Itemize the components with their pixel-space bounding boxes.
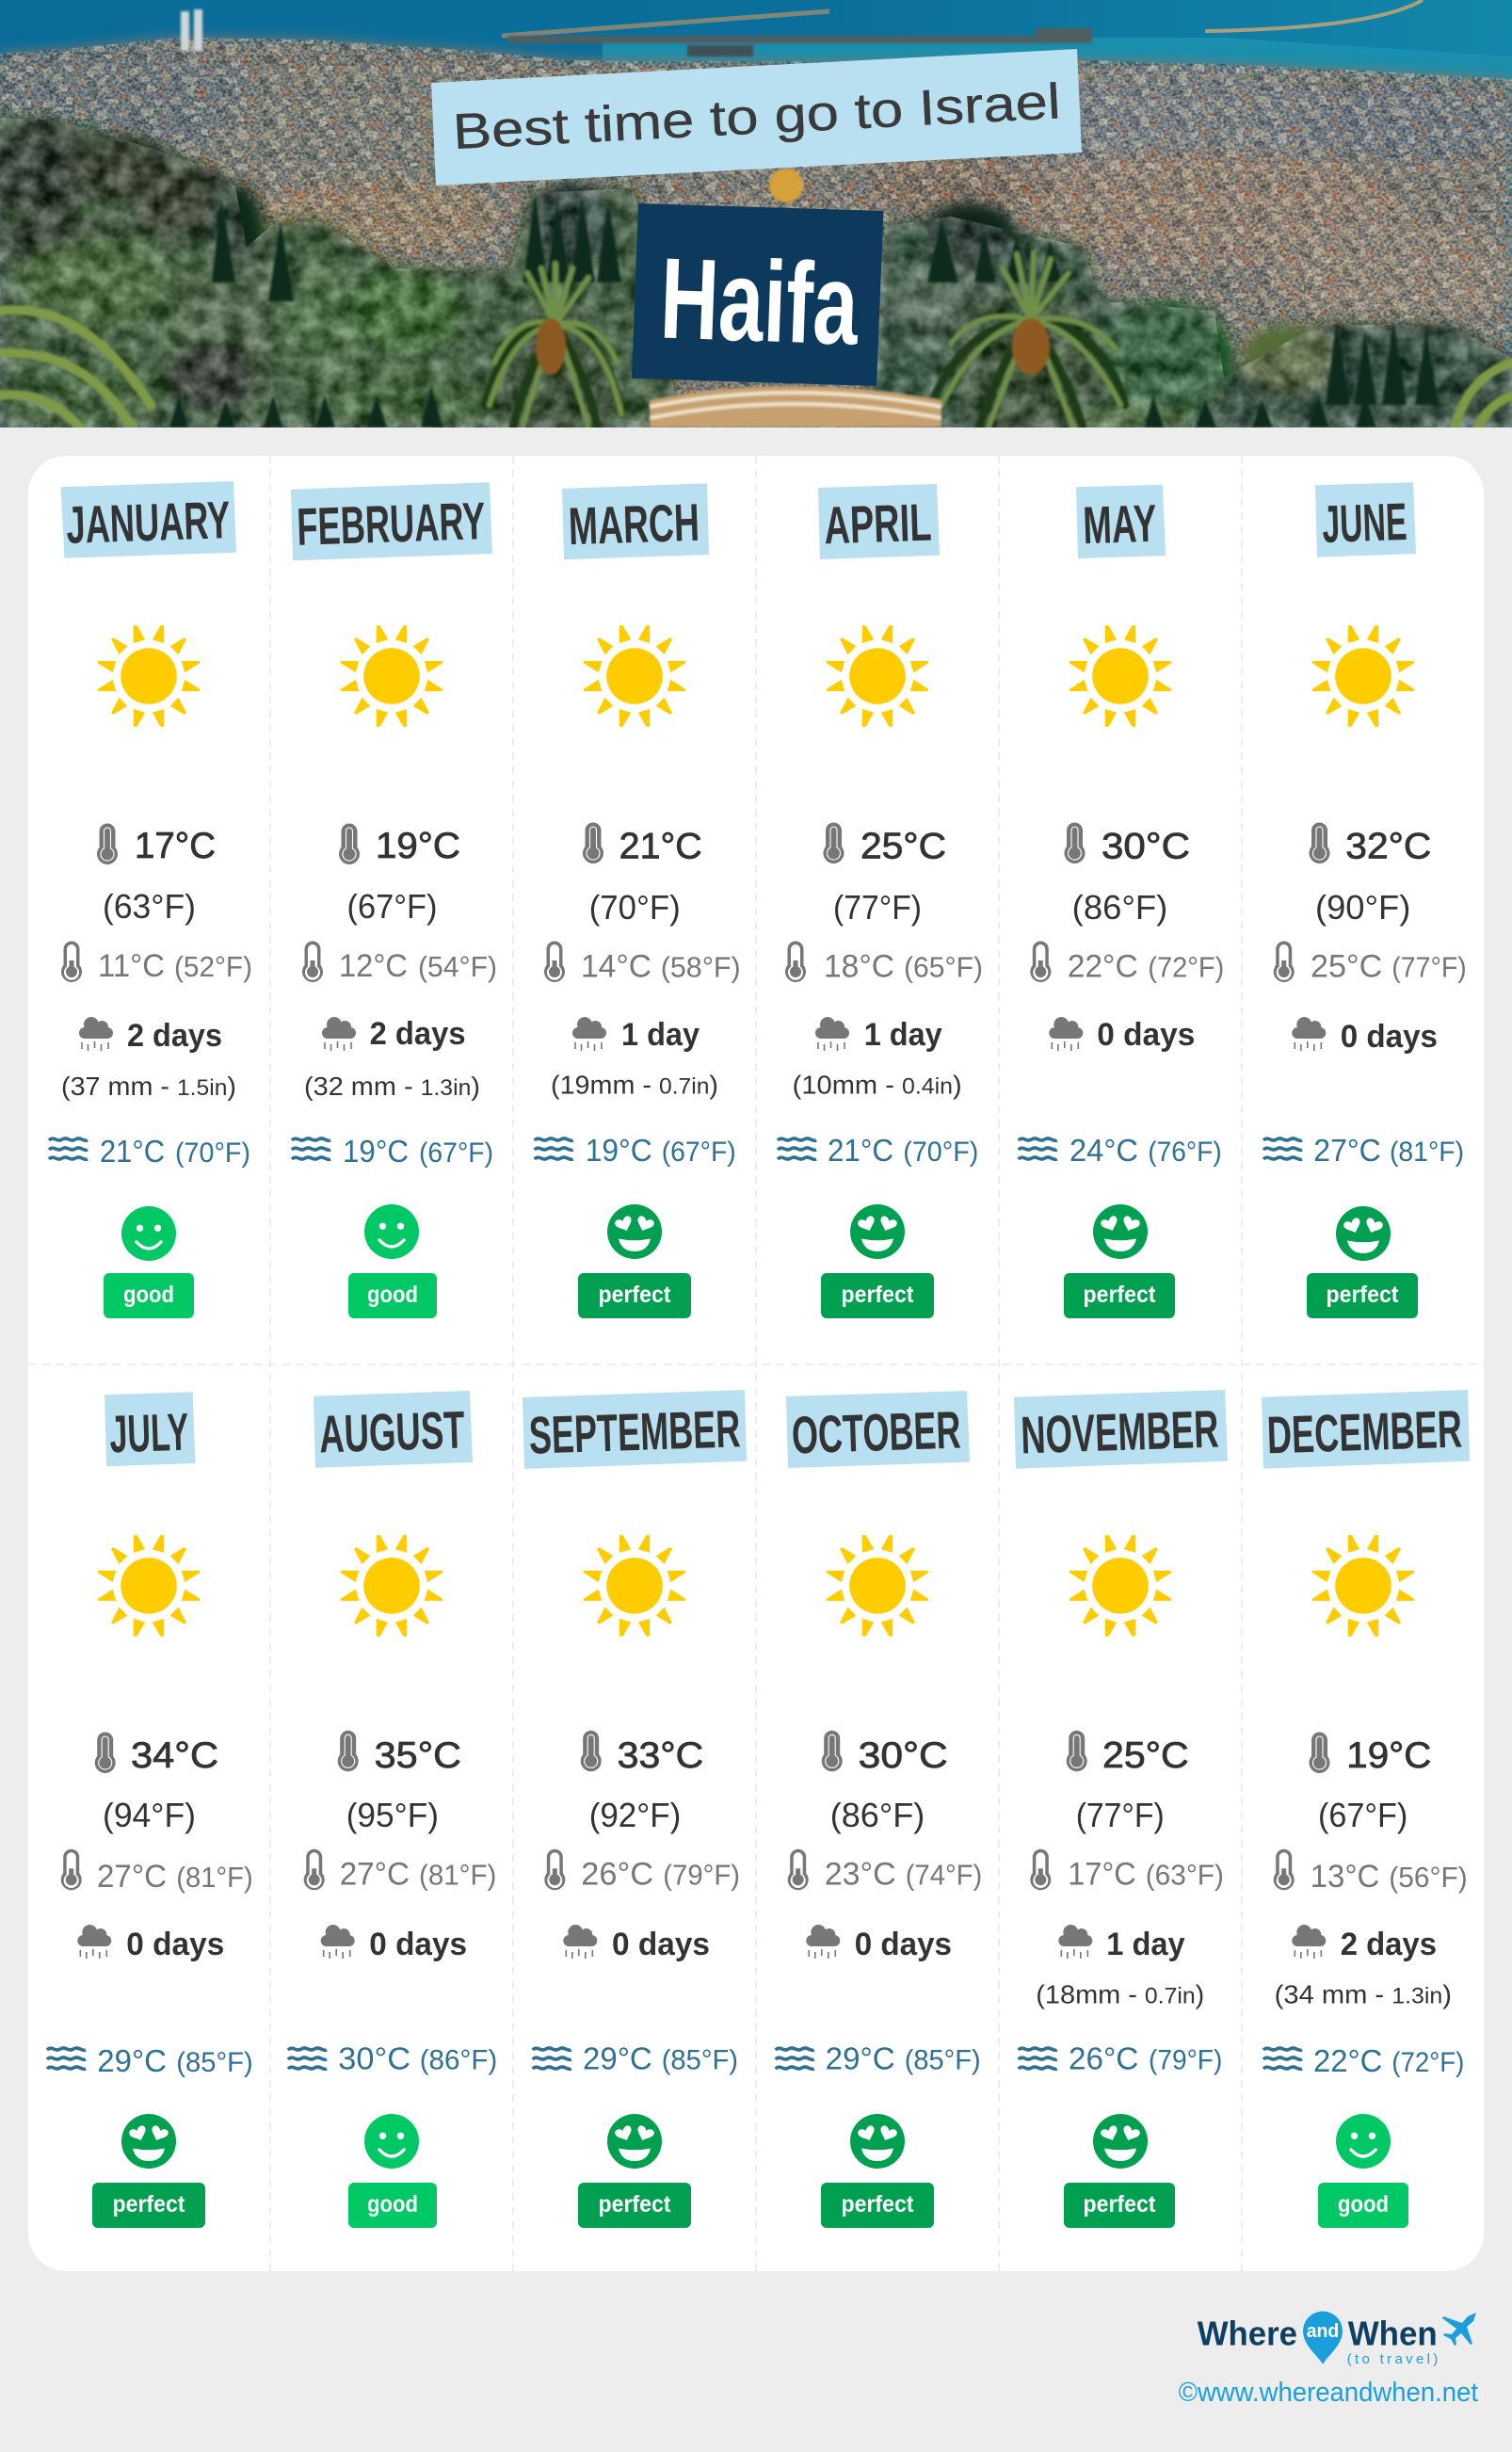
- low temperature: [1068, 949, 1224, 985]
- month label: July: JULY: [108, 1402, 189, 1463]
- sea temperature: (85°F): [662, 2045, 738, 2076]
- rainy days: 0 days: [855, 1927, 952, 1962]
- month label: January: [60, 481, 236, 558]
- sea temperature: [826, 2041, 981, 2076]
- high temperature: 25°C: [861, 827, 946, 867]
- icon: thermometer high: [583, 823, 603, 863]
- icon: waves: [49, 1138, 88, 1159]
- low temperature: 11°C: [98, 948, 165, 984]
- icon: thermometer high: [823, 823, 844, 863]
- icon: sun: [584, 1535, 685, 1637]
- icon: thermometer high: [95, 1733, 116, 1773]
- low temperature: [340, 1857, 496, 1893]
- rating badge: good: [1338, 2191, 1389, 2218]
- month label: May: [1076, 485, 1166, 558]
- icon: thermometer low: [1030, 1849, 1051, 1890]
- rating badge: [578, 1273, 691, 1318]
- icon: waves: [47, 2048, 86, 2069]
- sea temperature: [338, 2041, 497, 2076]
- high temperature fahrenheit: (95°F): [346, 1796, 439, 1834]
- icon: waves: [288, 2048, 327, 2069]
- sea temperature: [583, 2041, 738, 2076]
- column: December: [1262, 1390, 1470, 2228]
- icon: smiley good: [364, 1204, 419, 1259]
- high temperature fahrenheit: (92°F): [589, 1796, 681, 1834]
- rating badge: [578, 2183, 691, 2228]
- icon: sun: [341, 1535, 442, 1637]
- icon: smiley good: [1336, 2114, 1391, 2169]
- rainy days: 0 days: [369, 1927, 467, 1962]
- low temperature: 12°C: [339, 948, 408, 984]
- high temperature: 34°C: [131, 1735, 218, 1776]
- month label: April: APRIL: [823, 492, 932, 555]
- icon: waves: [1263, 2048, 1302, 2069]
- icon: rain cloud: [1058, 1925, 1092, 1959]
- sea temperature: [1313, 1133, 1464, 1168]
- precipitation: (18mm - 0.7in): [1036, 1980, 1204, 2009]
- column: September: [523, 1390, 747, 2228]
- icon: thermometer high: [97, 823, 118, 864]
- rainy days: 1 day: [621, 1017, 700, 1053]
- rating badge: [104, 1273, 194, 1318]
- low temperature: 22°C: [1068, 949, 1138, 985]
- rating badge: [348, 2183, 437, 2228]
- precipitation: (19mm - 0.7in): [551, 1071, 718, 1100]
- column: February: [291, 482, 497, 1318]
- high temperature: 25°C: [1102, 1735, 1189, 1776]
- low temperature: (65°F): [904, 951, 983, 984]
- city base tones: [0, 38, 1512, 427]
- icon: smiley perfect: [607, 2114, 662, 2169]
- high temperature fahrenheit: (86°F): [830, 1796, 925, 1834]
- sea temperature: 19°C: [586, 1133, 652, 1168]
- icon: rain cloud: [815, 1017, 849, 1051]
- month label: October: [786, 1391, 970, 1468]
- high temperature fahrenheit: (94°F): [103, 1796, 196, 1834]
- high temperature: 32°C: [1345, 827, 1431, 867]
- low temperature: [824, 949, 983, 985]
- icon: sun: [1070, 625, 1171, 727]
- column: May: [1019, 485, 1224, 1318]
- precipitation: (10mm - 0.4in): [793, 1071, 962, 1100]
- logo: Where and When to travel: Where: [1198, 2315, 1297, 2353]
- rating badge: perfect: [1083, 2191, 1156, 2218]
- month label: June: JUNE: [1321, 492, 1407, 554]
- rating badge: perfect: [599, 1282, 671, 1308]
- sea temperature: (86°F): [420, 2045, 497, 2076]
- low temperature: [339, 948, 497, 984]
- sea temperature: [1069, 2041, 1222, 2076]
- icon: waves: [535, 1138, 573, 1159]
- low temperature: 17°C: [1068, 1857, 1136, 1893]
- rating badge: [92, 2183, 205, 2228]
- sea temperature: [586, 1133, 736, 1168]
- high temperature: 21°C: [619, 827, 702, 867]
- column: November: [1014, 1390, 1228, 2228]
- sea temperature: (67°F): [419, 1137, 493, 1169]
- high temperature: 30°C: [1102, 827, 1190, 867]
- icon: smiley perfect: [607, 1204, 662, 1259]
- low temperature: 13°C: [1311, 1859, 1379, 1895]
- icon: thermometer high: [1067, 1731, 1087, 1771]
- hero photo: Haifa bay and gardens: [0, 0, 1512, 452]
- month label: October: OCTOBER: [791, 1400, 961, 1464]
- icon: thermometer low: [1274, 942, 1295, 982]
- sea temperature: 22°C: [1313, 2043, 1382, 2078]
- icon: sun: [98, 1535, 200, 1637]
- icon: thermometer low: [304, 1849, 325, 1890]
- rainy days: 0 days: [126, 1927, 224, 1962]
- icon: rain cloud: [79, 1017, 113, 1051]
- icon: smiley perfect: [850, 1204, 905, 1259]
- rating badge: perfect: [1083, 1282, 1156, 1308]
- precipitation: (34 mm - 1.3in): [1275, 1980, 1452, 2009]
- sea temperature: 19°C: [343, 1134, 409, 1169]
- high temperature fahrenheit: (86°F): [1072, 888, 1167, 927]
- rating badge: [821, 1273, 934, 1318]
- month label: July: [105, 1392, 196, 1466]
- icon: thermometer low: [544, 942, 565, 982]
- icon: thermometer high: [822, 1731, 843, 1771]
- icon: sun: [98, 625, 200, 727]
- low temperature: 26°C: [581, 1857, 653, 1893]
- icon: rain cloud: [1049, 1017, 1083, 1051]
- precipitation: (37 mm - 1.5in): [61, 1072, 236, 1101]
- rating badge: good: [123, 1282, 174, 1308]
- city heading: Haifa: [632, 203, 883, 386]
- rainy days: 0 days: [612, 1927, 710, 1962]
- title banner: Best time to go to Israel: Best time to go to Israel: [452, 73, 1062, 160]
- sea temperature: [100, 1134, 250, 1169]
- low temperature: [98, 948, 252, 984]
- low temperature: 25°C: [1311, 949, 1382, 985]
- sea temperature: (79°F): [1149, 2045, 1222, 2076]
- rating badge: perfect: [842, 1282, 914, 1308]
- high temperature: 35°C: [375, 1735, 461, 1776]
- icon: smiley perfect: [1093, 2114, 1148, 2169]
- sea temperature: (81°F): [1390, 1137, 1464, 1168]
- low temperature: (58°F): [661, 951, 741, 984]
- precipitation: (32 mm - 1.3in): [304, 1072, 480, 1101]
- logo: Where and When to travel: and: [1307, 2321, 1339, 2342]
- month label: September: SEPTEMBER: [528, 1398, 741, 1465]
- panel: monthly weather table: [28, 456, 1484, 2271]
- month label: February: [291, 482, 492, 560]
- city heading: Haifa: Haifa: [658, 234, 861, 369]
- icon: rain cloud: [563, 1925, 597, 1959]
- logo: Where and When to travel: (to travel): [1347, 2351, 1438, 2367]
- icon: thermometer high: [581, 1731, 602, 1771]
- icon: sun: [1312, 625, 1414, 727]
- rainy days: 2 days: [1341, 1927, 1437, 1962]
- icon: thermometer low: [785, 942, 806, 982]
- icon: rain cloud: [322, 1017, 356, 1051]
- column: October: [776, 1391, 982, 2228]
- icon: sun: [827, 625, 928, 727]
- month label: May: MAY: [1082, 493, 1157, 555]
- low temperature: (54°F): [418, 950, 497, 983]
- icon: waves: [1019, 1138, 1057, 1159]
- rainy days: 2 days: [127, 1018, 222, 1054]
- rainy days: 1 day: [1106, 1927, 1185, 1962]
- icon: rain cloud: [806, 1925, 840, 1959]
- rainy days: 1 day: [864, 1017, 942, 1053]
- icon: thermometer low: [788, 1849, 809, 1890]
- low temperature: 18°C: [824, 949, 894, 985]
- rating badge: [348, 1273, 437, 1318]
- low temperature: (77°F): [1391, 951, 1467, 984]
- column: March: [535, 483, 741, 1318]
- high temperature fahrenheit: (67°F): [1318, 1796, 1407, 1834]
- low temperature: [825, 1857, 982, 1893]
- icon: sun: [1312, 1535, 1414, 1637]
- hillside greenery: [0, 118, 1512, 447]
- high temperature: 17°C: [135, 826, 216, 866]
- high temperature fahrenheit: (77°F): [1076, 1796, 1165, 1834]
- icon: sun: [341, 625, 442, 727]
- sea temperature: (85°F): [176, 2047, 253, 2078]
- low temperature: (81°F): [176, 1861, 253, 1894]
- website credit: ©www.whereandwhen.net: [1179, 2378, 1478, 2408]
- rating badge: good: [367, 1282, 418, 1308]
- icon: thermometer high: [339, 823, 360, 864]
- city buildings texture: [0, 38, 1512, 427]
- icon: sun: [584, 625, 685, 727]
- low temperature: [581, 949, 741, 985]
- month label: March: [562, 483, 709, 559]
- rating badge: perfect: [842, 2191, 914, 2218]
- low temperature: (79°F): [663, 1859, 740, 1892]
- low temperature: 27°C: [97, 1859, 167, 1895]
- month label: September: [523, 1390, 747, 1469]
- low temperature: [1311, 949, 1467, 985]
- low temperature: [1311, 1859, 1468, 1895]
- rating badge: [1064, 1273, 1175, 1318]
- low temperature: (56°F): [1389, 1861, 1468, 1894]
- icon: thermometer high: [1064, 823, 1085, 863]
- icon: rain cloud: [572, 1017, 606, 1051]
- rainy days: 0 days: [1341, 1019, 1438, 1055]
- sea temperature: (70°F): [903, 1137, 978, 1168]
- low temperature: (72°F): [1148, 951, 1224, 984]
- icon: waves: [292, 1138, 330, 1159]
- sea temperature: (76°F): [1148, 1137, 1222, 1168]
- low temperature: 27°C: [340, 1857, 410, 1893]
- month label: June: [1315, 482, 1416, 557]
- rating badge: [1307, 1273, 1418, 1318]
- high temperature fahrenheit: (70°F): [589, 888, 681, 927]
- icon: rain cloud: [1292, 1017, 1326, 1051]
- sea temperature: (67°F): [662, 1137, 736, 1168]
- icon: thermometer low: [61, 1849, 82, 1890]
- sea temperature: (85°F): [905, 2045, 981, 2076]
- column: April: [778, 484, 983, 1318]
- icon: waves: [776, 2048, 814, 2069]
- icon: rain cloud: [77, 1925, 111, 1959]
- icon: sun: [1070, 1535, 1171, 1637]
- high temperature fahrenheit: (90°F): [1315, 888, 1410, 927]
- month label: March: MARCH: [568, 492, 700, 556]
- month label: November: [1014, 1390, 1228, 1469]
- icon: thermometer high: [1309, 1733, 1329, 1773]
- sea temperature: 21°C: [100, 1134, 165, 1169]
- column: January: [49, 481, 252, 1318]
- icon: smiley perfect: [850, 2114, 905, 2169]
- column: July: [47, 1392, 253, 2228]
- trees, palms and terrace details: [0, 9, 1512, 427]
- rainy days: 2 days: [370, 1016, 466, 1052]
- icon: thermometer low: [302, 942, 323, 982]
- sea temperature: 30°C: [338, 2041, 410, 2076]
- icon: smiley good: [364, 2114, 419, 2169]
- icon: smiley perfect: [1093, 1204, 1148, 1259]
- icon: map pin: [1303, 2311, 1343, 2364]
- month label: January: JANUARY: [65, 490, 231, 555]
- month label: April: [818, 484, 940, 559]
- low temperature: [581, 1857, 740, 1893]
- sea temperature: (70°F): [175, 1137, 250, 1169]
- high temperature fahrenheit: (67°F): [346, 887, 437, 926]
- month label: November: NOVEMBER: [1020, 1399, 1219, 1464]
- month label: August: AUGUST: [318, 1399, 466, 1464]
- sea temperature: [1070, 1133, 1222, 1168]
- column: June: [1263, 482, 1467, 1318]
- rating badge: [821, 2183, 934, 2228]
- rainy days: 0 days: [1097, 1017, 1195, 1053]
- low temperature: 14°C: [581, 949, 651, 985]
- sea temperature: 27°C: [1313, 1133, 1381, 1168]
- sea temperature: 29°C: [97, 2043, 167, 2078]
- icon: thermometer low: [61, 942, 82, 982]
- month label: August: [314, 1391, 473, 1468]
- title banner: Best time to go to Israel: [431, 49, 1082, 186]
- sea temperature: 26°C: [1069, 2041, 1138, 2076]
- sea temperature: 29°C: [583, 2041, 652, 2076]
- low temperature: (63°F): [1146, 1859, 1224, 1892]
- icon: waves: [1019, 2048, 1057, 2069]
- low temperature: [1068, 1857, 1224, 1893]
- sea temperature: [97, 2043, 253, 2078]
- low temperature: (81°F): [419, 1859, 496, 1892]
- sea temperature: 21°C: [828, 1133, 893, 1168]
- icon: thermometer low: [1030, 942, 1051, 982]
- high temperature fahrenheit: (77°F): [833, 888, 922, 927]
- high temperature: 30°C: [859, 1735, 948, 1776]
- rating badge: [1318, 2183, 1408, 2228]
- sea temperature: 29°C: [826, 2041, 895, 2076]
- low temperature: (52°F): [174, 950, 252, 983]
- icon: thermometer high: [338, 1731, 359, 1771]
- icon: rain cloud: [1292, 1925, 1326, 1959]
- low temperature: (74°F): [906, 1859, 982, 1892]
- rating badge: good: [367, 2191, 418, 2218]
- high temperature: 19°C: [1346, 1735, 1431, 1776]
- icon: thermometer low: [544, 1849, 565, 1890]
- rating badge: perfect: [599, 2191, 671, 2218]
- rating badge: perfect: [113, 2191, 185, 2218]
- sea temperature: [1313, 2043, 1464, 2078]
- month label: February: FEBRUARY: [296, 491, 486, 557]
- rating badge: perfect: [1326, 1282, 1399, 1308]
- high temperature: 33°C: [618, 1735, 703, 1776]
- icon: smiley perfect: [1336, 1206, 1391, 1261]
- high temperature fahrenheit: (63°F): [103, 887, 196, 926]
- icon: thermometer high: [1309, 823, 1329, 863]
- logo: Where and When to travel: When: [1348, 2315, 1438, 2353]
- sea temperature: 24°C: [1070, 1133, 1138, 1168]
- logo: Where and When to travel: [1198, 2311, 1476, 2367]
- sea temperature: [828, 1133, 978, 1168]
- column: August: [288, 1391, 497, 2228]
- sea temperature: [343, 1134, 493, 1169]
- low temperature: [97, 1859, 253, 1895]
- icon: waves: [533, 2048, 571, 2069]
- icon: waves: [1263, 1138, 1302, 1159]
- low temperature: 23°C: [825, 1857, 896, 1893]
- icon: sun: [827, 1535, 928, 1637]
- sea temperature: (72°F): [1391, 2047, 1464, 2078]
- icon: airplane: [1442, 2313, 1476, 2346]
- rating badge: [1064, 2183, 1175, 2228]
- icon: smiley perfect: [121, 2114, 176, 2169]
- icon: smiley good: [121, 1206, 176, 1261]
- icon: thermometer low: [1274, 1849, 1295, 1890]
- high temperature: 19°C: [376, 826, 460, 866]
- icon: waves: [778, 1138, 816, 1159]
- icon: rain cloud: [321, 1925, 355, 1959]
